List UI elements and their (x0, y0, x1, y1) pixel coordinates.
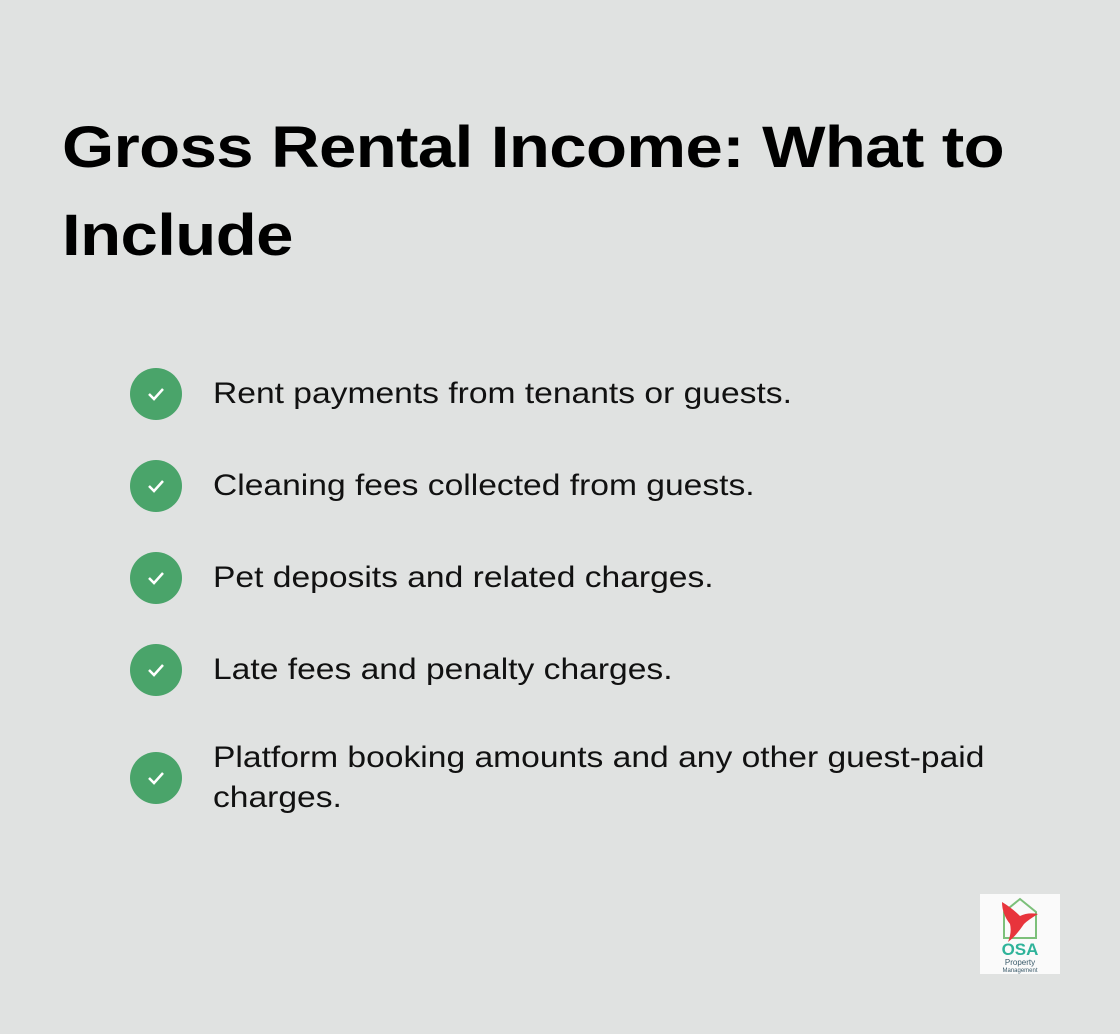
logo: OSA (1002, 940, 1038, 959)
icon: check (130, 552, 182, 604)
item 1 (130, 368, 792, 420)
icon: check (130, 752, 182, 804)
item 2 (130, 460, 755, 512)
text: Pet deposits and related charges. (213, 561, 714, 594)
title: Gross Rental Income: What to Include (62, 115, 1004, 268)
text: Cleaning fees collected from guests. (213, 469, 755, 502)
text: Rent payments from tenants or guests. (213, 377, 792, 410)
text: Platform booking amounts and any other guest-paid charges. (213, 741, 984, 814)
icon: check (130, 644, 182, 696)
text: Late fees and penalty charges. (213, 653, 673, 686)
item 3 (130, 552, 714, 604)
logo (980, 894, 1060, 974)
logo: Property (1005, 958, 1035, 967)
item 5 (130, 741, 984, 814)
logo: Management (1002, 968, 1038, 974)
icon: check (130, 460, 182, 512)
icon: check (130, 368, 182, 420)
item 4 (130, 644, 673, 696)
